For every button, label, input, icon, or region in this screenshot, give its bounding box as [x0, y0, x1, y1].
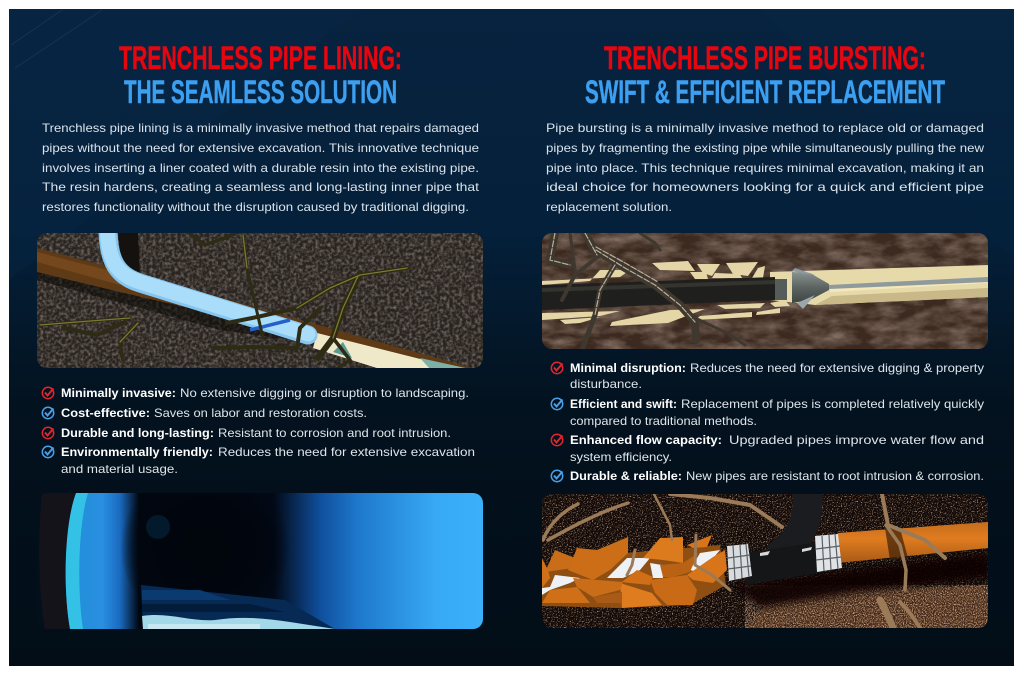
text block: pipe lining description: pipes without the need for extensive excavation. This innovative technique	[42, 142, 479, 155]
item: enhanced flow capacity: system efficiency.	[570, 451, 672, 464]
icon: blue check	[551, 470, 563, 482]
item: minimal disruption	[570, 362, 984, 391]
text block: pipe bursting description: pipes by fragmenting the existing pipe while simultaneously pulling the new	[546, 142, 985, 155]
text block: pipe bursting description: replacement solution.	[546, 201, 672, 214]
image: pipe bursting head fragmenting old pipe	[542, 233, 988, 350]
item: environmentally friendly	[61, 446, 475, 476]
icon: blue check	[42, 446, 54, 458]
item: efficient and swift: compared to traditional methods.	[570, 415, 757, 428]
item: durable and reliable: New pipes are resistant to root intrusion & corrosion.	[686, 470, 984, 483]
item: minimally invasive: Minimally invasive:	[61, 387, 176, 400]
text block: pipe lining description: Trenchless pipe lining is a minimally invasive method that repairs damaged	[42, 122, 479, 135]
icon: red check	[551, 362, 563, 374]
icon: red check	[42, 387, 54, 399]
checklist: pipe lining benefits	[42, 387, 475, 476]
item: cost-effective	[61, 407, 367, 420]
item: environmentally friendly: Environmentally friendly:	[61, 446, 213, 459]
text block: pipe bursting description: pipe into place. This technique requires minimal excavation, making it an	[546, 162, 984, 175]
item: efficient and swift: Replacement of pipes is completed relatively quickly	[681, 398, 984, 411]
text block: pipe bursting description: Pipe bursting is a minimally invasive method to replace old or damaged	[546, 122, 984, 135]
image: liner inside buried pipe with roots	[37, 228, 483, 376]
steel rod	[829, 277, 988, 289]
silver clamps	[727, 534, 842, 581]
icon: red check	[42, 427, 54, 439]
heading: trenchless pipe bursting	[585, 40, 945, 110]
orange shards	[542, 535, 727, 608]
black elbow	[775, 494, 808, 558]
light blue liner tube	[108, 228, 308, 335]
item: enhanced flow capacity	[570, 434, 984, 464]
item: minimal disruption: disturbance.	[570, 378, 642, 391]
item: efficient and swift: Efficient and swift:	[570, 398, 677, 411]
roots	[40, 234, 407, 370]
text block: pipe bursting description: ideal choice for homeowners looking for a quick and efficient pipe	[546, 181, 984, 194]
text block: pipe lining description	[42, 122, 480, 214]
item: environmentally friendly: and material usage.	[61, 463, 178, 476]
expander head	[775, 279, 787, 300]
item: minimal disruption: Reduces the need for extensive digging & property	[690, 362, 984, 375]
item: durable and long-lasting	[61, 427, 451, 440]
item: durable and reliable: Durable & reliable:	[570, 470, 682, 483]
orange underlay of burst pipe	[542, 545, 726, 608]
text block: pipe bursting description	[546, 122, 985, 214]
item: cost-effective: Cost-effective:	[61, 407, 150, 420]
icon: blue check	[551, 398, 563, 410]
text block: pipe lining description: The resin hardens, creating a seamless and long-lasting inner pipe that	[42, 181, 480, 194]
item: enhanced flow capacity: Upgraded pipes improve water flow and	[729, 434, 984, 447]
image: new pipe pulled through burst orange pipe	[542, 494, 990, 628]
item: durable and reliable	[570, 470, 984, 483]
cream pipe interior	[313, 333, 429, 368]
roots	[550, 233, 745, 350]
heading: trenchless pipe lining	[119, 40, 402, 110]
text block: pipe lining description: restores functionality without the disruption caused by traditional digging.	[42, 201, 469, 214]
old brown pipe	[37, 248, 483, 376]
item: efficient and swift	[570, 398, 984, 428]
icon: blue check	[42, 407, 54, 419]
item: enhanced flow capacity: Enhanced flow capacity:	[570, 434, 722, 447]
shaft shadow	[118, 233, 140, 275]
black new pipe	[542, 277, 775, 310]
burst pipe shards	[542, 261, 790, 326]
item: durable and long-lasting: Resistant to corrosion and root intrusion.	[218, 427, 451, 440]
icon: red check	[551, 434, 563, 446]
image: liner seen from inside pipe	[40, 493, 483, 629]
white exposed pipe	[542, 550, 720, 595]
new cream pipe	[770, 265, 988, 305]
heading: trenchless pipe lining: TRENCHLESS PIPE LINING:	[119, 40, 402, 76]
item: minimally invasive	[61, 387, 469, 400]
water on pipe floor	[141, 585, 335, 629]
item: durable and long-lasting: Durable and long-lasting:	[61, 427, 214, 440]
item: environmentally friendly: Reduces the need for extensive excavation	[218, 446, 475, 459]
roots	[543, 494, 945, 628]
orange new pipe	[838, 522, 988, 563]
item: minimally invasive: No extensive digging or disruption to landscaping.	[180, 387, 469, 400]
checklist: pipe bursting benefits	[551, 362, 984, 483]
heading: trenchless pipe lining: THE SEAMLESS SOLUTION	[124, 74, 397, 110]
text block: pipe lining description: involves inserting a liner coated with a durable resin into the existing pipe.	[42, 162, 479, 175]
item: minimal disruption: Minimal disruption:	[570, 362, 686, 375]
item: cost-effective: Saves on labor and restoration costs.	[154, 407, 367, 420]
